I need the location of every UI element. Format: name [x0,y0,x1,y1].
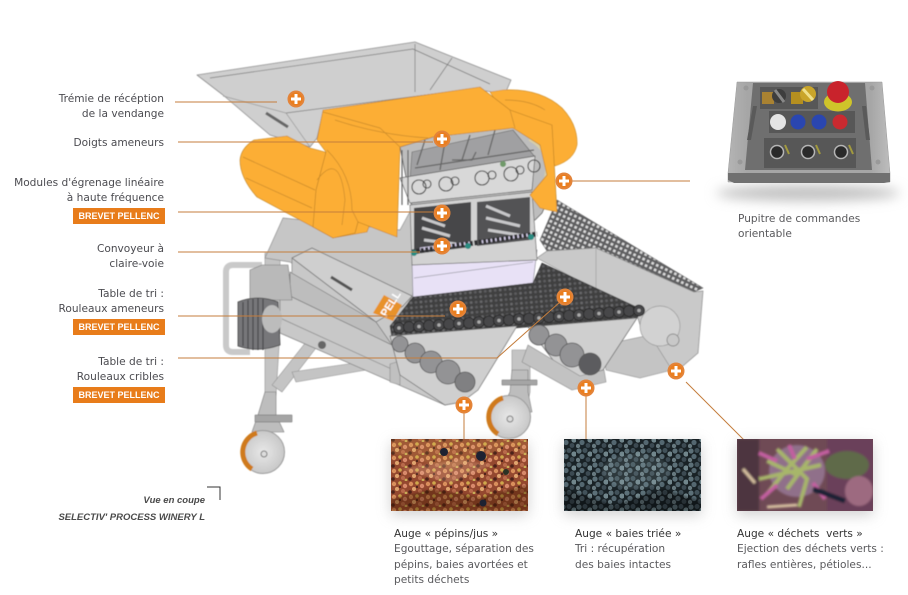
label: pupitre [738,213,860,240]
label: trémie [58,93,164,120]
label: pupitre: Pupitre de commandes [738,213,860,225]
leader lines [175,102,745,441]
right side housing [537,248,703,371]
side beam [280,248,447,405]
caption: baies [574,528,681,571]
label: modules: Modules d'égrenage linéaire [14,177,164,189]
PELL orange label: PELL [379,289,404,319]
orange right lobe [490,90,577,166]
plus: doigts [434,132,450,146]
caption: pépins [394,528,534,586]
rear legs [265,253,530,410]
castor wheel left [242,392,292,474]
trough right [528,318,637,378]
plus: auge baies [578,380,594,396]
section note [58,495,205,522]
selector switches [762,92,774,104]
orange main hood [313,87,557,238]
spiral screws [392,325,601,392]
label: modules: à haute fréquence [67,192,164,204]
plus: convoyeur [434,238,450,254]
label: convoyeur [97,243,164,270]
label: trémie: Trémie de récéption [59,93,164,105]
photo: déchets verts [737,439,873,515]
label: doigts: Doigts ameneurs [74,137,164,149]
plus: rouleaux cribles [558,290,572,304]
caption: pépins: Auge « pépins/jus » [394,528,498,540]
photo: pépins [391,439,528,515]
caption: baies: des baies intactes [575,559,671,571]
label: trémie: de la vendange [82,108,164,120]
label: pupitre: orientable [738,228,792,240]
push buttons [770,114,786,130]
plus: auge pépins [456,398,472,412]
control panel [716,81,900,201]
rollers front [394,305,644,334]
plus: modules [434,206,450,220]
label: convoyeur: Convoyeur à [97,243,164,255]
orange left lobe [240,136,375,238]
caption: déchets [737,528,884,571]
plus markers [288,92,684,412]
badge: brevet 1 [73,208,165,224]
gearbox [250,265,292,300]
lavender sorting chute [412,250,537,298]
caption: déchets: Auge « déchets verts » [737,528,863,540]
dials [770,146,848,158]
caption: baies: Tri : récupération [575,543,665,555]
mechanism opening [400,127,552,220]
label: rouleaux cribles [77,356,164,383]
plus: pupitre [556,174,572,188]
hopper [197,42,511,147]
badge: brevet 3 [73,387,165,403]
section note: Vue en coupe [143,495,205,506]
corner mark [207,487,220,500]
caption: pépins: pépins, baies avortées et [394,559,528,571]
mesh conveyor panel [540,200,703,292]
trough left [390,326,517,405]
section note: SELECTIV' PROCESS WINERY L [58,512,205,522]
label: modules [14,177,164,204]
label: rouleaux ameneurs: Table de tri : [98,288,164,300]
roller table [390,263,643,338]
badge: brevet 2: BREVET PELLENC [78,322,160,332]
label: convoyeur: claire-voie [109,258,164,270]
label: rouleaux ameneurs: Rouleaux ameneurs [58,303,164,315]
caption: pépins: petits déchets [394,574,469,586]
badge: brevet 1: BREVET PELLENC [78,211,160,221]
plus: trémie [288,92,304,106]
tube frame [226,265,262,352]
label: rouleaux cribles: Table de tri : [98,356,164,368]
plus: rouleaux ameneurs [450,302,466,316]
castor wheel right [488,370,537,438]
central body plate [265,208,418,318]
photo: baies [564,439,701,515]
emergency stop [824,92,852,112]
caption: déchets: rafles entières, pétioles... [737,559,872,571]
caption: déchets: Ejection des déchets verts : [737,543,884,555]
plus: auge déchets [668,364,684,378]
label: rouleaux ameneurs [58,288,164,315]
machine illustration [197,42,703,474]
badge: brevet 2 [73,319,165,335]
caption: baies: Auge « baies triée » [575,528,681,540]
motor [238,298,280,349]
label: rouleaux cribles: Rouleaux cribles [77,371,164,383]
badge: brevet 3: BREVET PELLENC [78,390,160,400]
caption: pépins: Egouttage, séparation des [394,543,534,555]
lower frame [410,192,537,265]
